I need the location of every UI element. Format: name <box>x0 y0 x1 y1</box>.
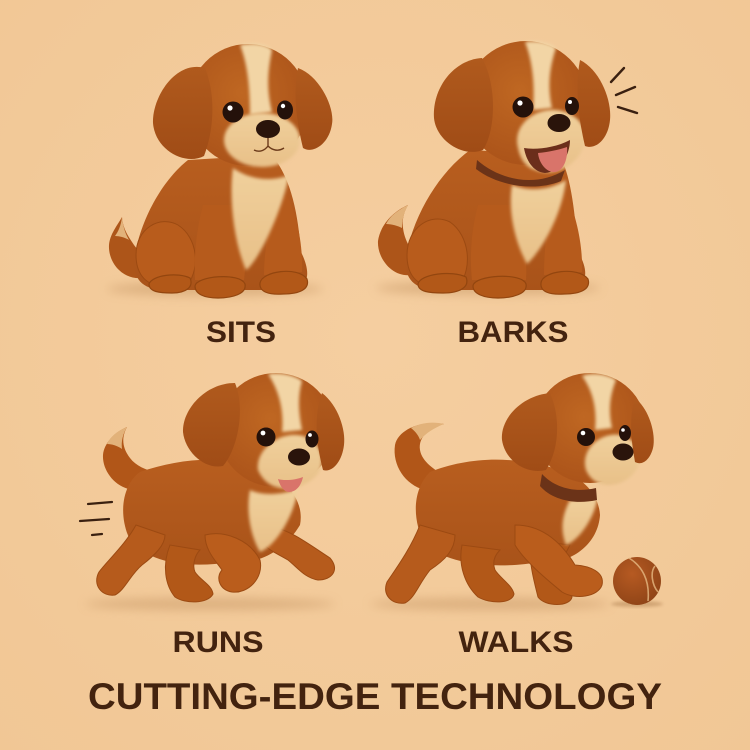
label: barks: BARKS <box>458 316 568 349</box>
icon: motion lines <box>80 502 112 535</box>
puppy: sits <box>107 44 332 298</box>
puppy: runs <box>85 373 344 610</box>
label: runs: RUNS <box>172 626 264 659</box>
label: walks: WALKS <box>458 626 574 659</box>
icon: ball <box>611 557 663 607</box>
icon: bark lines <box>611 68 637 113</box>
title: CUTTING-EDGE TECHNOLOGY <box>88 676 662 717</box>
label: sits: SITS <box>206 316 276 349</box>
puppy: barks <box>376 41 610 298</box>
puppy: walks <box>370 373 654 610</box>
